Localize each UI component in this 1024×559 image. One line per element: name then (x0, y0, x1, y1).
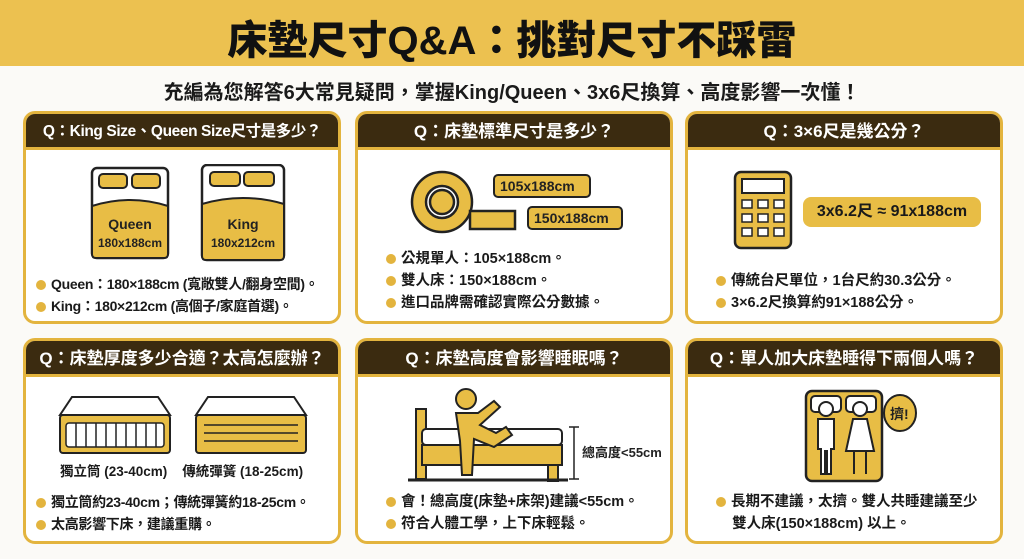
text: answers: 太高影響下床，建議重購。 (51, 516, 215, 532)
callout: conversion (803, 197, 981, 227)
panel: height: Q：床墊高度會影響睡眠嗎？ (405, 349, 623, 368)
icon: beds (90, 164, 286, 262)
icon: tape measure: 150x188cm (534, 210, 609, 226)
icon: beds: 180x212cm (211, 236, 275, 250)
panel: thickness: Q：床墊厚度多少合適？太高怎麼辦？ (39, 349, 325, 368)
panel: standard size (355, 111, 673, 324)
text: answers (386, 250, 604, 311)
panel: 3x6 (685, 111, 1003, 324)
text: answers: 3×6.2尺換算約91×188公分。 (731, 295, 918, 311)
text: answers: 雙人床：150×188cm。 (401, 273, 551, 289)
text: answers: 傳統台尺單位，1台尺約30.3公分。 (731, 273, 956, 289)
text: answers: Queen：180×188cm (寬敞雙人/翻身空間)。 (51, 276, 318, 292)
panel: 3x6: Q：3×6尺是幾公分？ (763, 122, 925, 141)
icon: beds: Queen (108, 216, 152, 232)
text: answers (36, 494, 310, 532)
text: answers (716, 272, 956, 311)
labels: 獨立筒 (23-40cm) 傳統彈簧 (18-25cm) (60, 464, 303, 479)
callout: conversion: 3x6.2尺 ≈ 91x188cm (817, 203, 967, 220)
icon: bed with person: 總高度<55cm (582, 445, 662, 460)
icon: bed with person (408, 388, 662, 482)
text: answers (386, 493, 639, 532)
panel: thickness (23, 338, 341, 544)
icon: mattresses (58, 396, 308, 454)
text: answers: 雙人床(150×188cm) 以上。 (732, 516, 911, 532)
title bar (0, 0, 1024, 66)
icon: tape measure: 105x188cm (500, 178, 575, 194)
panel: king queen (23, 111, 341, 324)
icon: crowded bed (804, 390, 917, 482)
text: answers (36, 276, 318, 314)
subtitle: 充編為您解答6大常見疑問，掌握King/Queen、3x6尺換算、高度影響一次懂！ (164, 82, 860, 104)
text: answers: 會！總高度(床墊+床架)建議<55cm。 (401, 494, 639, 510)
icon: crowded bed: 擠! (890, 406, 909, 422)
text: answers: 長期不建議，太擠。雙人共睡建議至少 (731, 494, 978, 510)
icon: beds: 180x188cm (98, 236, 162, 250)
panel: standard size: Q：床墊標準尺寸是多少？ (414, 122, 614, 141)
icon: beds: King (227, 216, 259, 232)
text: answers (716, 493, 978, 532)
panel: height (355, 338, 673, 544)
panel: single plus (685, 338, 1003, 544)
icon: tape measure (410, 170, 623, 234)
text: answers: 獨立筒約23-40cm；傳統彈簧約18-25cm。 (51, 494, 310, 510)
text: answers: 公規單人：105×188cm。 (401, 251, 566, 267)
panel: single plus: Q：單人加大床墊睡得下兩個人嗎？ (710, 349, 978, 368)
text: answers: 符合人體工學，上下床輕鬆。 (401, 516, 590, 532)
icon: calculator (734, 170, 792, 250)
text: answers: 進口品牌需確認實際公分數據。 (401, 295, 604, 311)
title: 床墊尺寸Q&A：挑對尺寸不踩雷 (228, 19, 796, 63)
panel: king queen: Q：King Size、Queen Size尺寸是多少？ (43, 123, 321, 140)
text: answers: King：180×212cm (高個子/家庭首選)。 (51, 298, 293, 314)
